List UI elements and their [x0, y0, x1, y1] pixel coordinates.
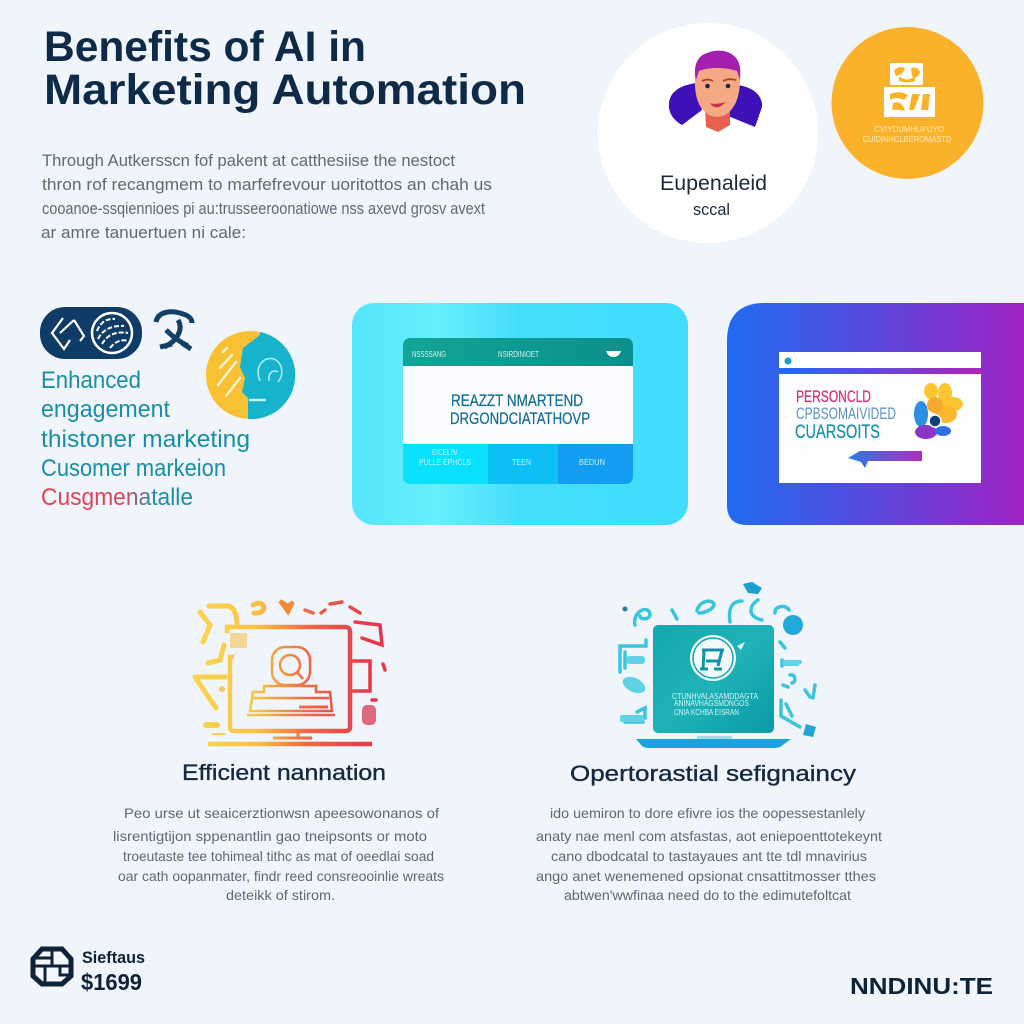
intro paragraph: [41, 151, 492, 242]
laptop screen: [653, 625, 774, 733]
personalized text: CUARSOITS: [795, 422, 880, 443]
footer brand icon: [33, 949, 71, 984]
window headline: [450, 391, 590, 428]
browser address bar: [779, 352, 981, 368]
left body paragraph: Peo urse ut seaicerztionwsn apeesowonanos of: [124, 805, 439, 821]
footer brand text: $1699: [81, 969, 142, 995]
screen text: [672, 692, 759, 717]
icon: AI face circle: [206, 331, 295, 419]
window footer labels: [419, 448, 605, 467]
enhanced engagement text block: [41, 367, 250, 511]
left decorations: [195, 603, 264, 734]
window footer labels: EICELIN: [432, 448, 457, 457]
pale blobs: [620, 656, 800, 722]
illustration: teal laptop: [620, 582, 816, 748]
browser content: [779, 374, 981, 483]
floating icons: [620, 600, 815, 727]
right body paragraph: anaty nae menl com atsfastas, aot eniepoenttotekeynt: [536, 828, 882, 844]
title: Marketing Automation: [44, 66, 526, 114]
icon: person avatar: [669, 51, 762, 132]
intro paragraph: thron rof recangmem to marfefrevour uoritottos an chah us: [42, 175, 492, 194]
left body paragraph: oar cath oopanmater, findr reed consreooinlie wreats: [118, 868, 444, 884]
right body paragraph: ango anet wenemened opsionat cnsattitmosser tthes: [536, 868, 876, 884]
arrow: [848, 451, 922, 468]
window header labels: NSIRDINIOET: [498, 350, 539, 359]
intro paragraph: cooanoe-ssqiennioes pi au:trusseeroonatiowe nss axevd grosv avext: [42, 199, 485, 218]
laptop base: [636, 739, 791, 748]
right decorations: [305, 602, 385, 700]
panel: cyan dashboard card: [352, 303, 688, 525]
left body paragraph: [113, 805, 444, 903]
badge caption: CUIDINHCLBEROMASTD: [862, 135, 952, 144]
left body paragraph: troeutaste tee tohimeal tithc as mat of oeedlai soad: [123, 848, 434, 864]
panel: profile circle: [598, 23, 818, 243]
footer brand text: [81, 948, 145, 995]
screen text: CTUNHVALASAMDDAGTA: [672, 692, 759, 701]
right body paragraph: ido uemiron to dore efivre ios the oopessestanlely: [550, 805, 865, 821]
central computer icon: [247, 647, 335, 715]
screen text: ANINAVHAGSMDNGOS: [674, 699, 749, 708]
heading: efficient: Efficient nannation: [182, 760, 386, 785]
icon: robot document: [884, 63, 935, 117]
profile label: Eupenaleid: [660, 172, 767, 195]
panel: purple personalized card: [727, 303, 1024, 525]
badge caption: CVIYDUMHUFUYO: [874, 125, 944, 134]
panel: orange badge: [832, 27, 984, 179]
intro paragraph: Through Autkersscn fof pakent at catthesiise the nestoct: [42, 151, 455, 170]
window header labels: NSSSSANG: [412, 350, 446, 359]
enhanced engagement text block: thistoner marketing: [41, 426, 250, 453]
left body paragraph: lisrentigtijon sppenantlin gao tneipsonts or moto: [113, 828, 427, 844]
right body paragraph: abtwen'wwfinaa need do to the edimutefoltcat: [564, 887, 851, 903]
enhanced engagement text block: Cusomer markeion: [41, 455, 226, 482]
window headline: DRGONDCIATATHOVP: [450, 409, 590, 428]
icon: cart circle: [690, 635, 745, 681]
personalized text: [795, 387, 896, 443]
personalized text: CPBSOMAIVIDED: [796, 404, 896, 423]
illustration: orange monitor: [195, 601, 385, 744]
right body paragraph: [536, 805, 882, 903]
enhanced engagement text block: Enhanced: [41, 367, 141, 394]
window headline: REAZZT NMARTEND: [451, 391, 583, 410]
icon: dark pill with code and fingerprint: [40, 307, 142, 359]
monitor frame: [227, 627, 350, 731]
icon: colourful flower: [914, 383, 963, 439]
footer logo wordmark: NNDINU:TE: [850, 973, 993, 999]
personalized text: PERSONCLD: [796, 387, 871, 406]
screen text: CNIA KCHBA EISRAN: [674, 708, 739, 717]
intro paragraph: ar amre tanuertuen ni cale:: [41, 223, 246, 242]
window footer labels: BEDUN: [579, 458, 605, 467]
heading: operational: Opertorastial sefignaincy: [570, 761, 856, 786]
title: [44, 23, 526, 114]
right body paragraph: cano dbodcatal to tastayaues ant tte tdl mnavirius: [551, 848, 867, 864]
icon: knot symbol: [156, 312, 192, 349]
window footer labels: TEEN: [512, 458, 531, 467]
window header labels: [412, 350, 539, 359]
badge caption: [862, 125, 952, 144]
title: Benefits of AI in: [44, 23, 366, 71]
footer brand text: Sieftaus: [82, 948, 145, 967]
dashboard window: [403, 338, 633, 484]
profile sublabel: sccal: [693, 200, 730, 219]
window footer labels: PULLE EPHCLS: [419, 458, 471, 467]
enhanced engagement text block: Cusgmenatalle: [41, 484, 193, 511]
enhanced engagement text block: engagement: [41, 396, 170, 423]
left body paragraph: deteikk of stirom.: [226, 887, 335, 903]
